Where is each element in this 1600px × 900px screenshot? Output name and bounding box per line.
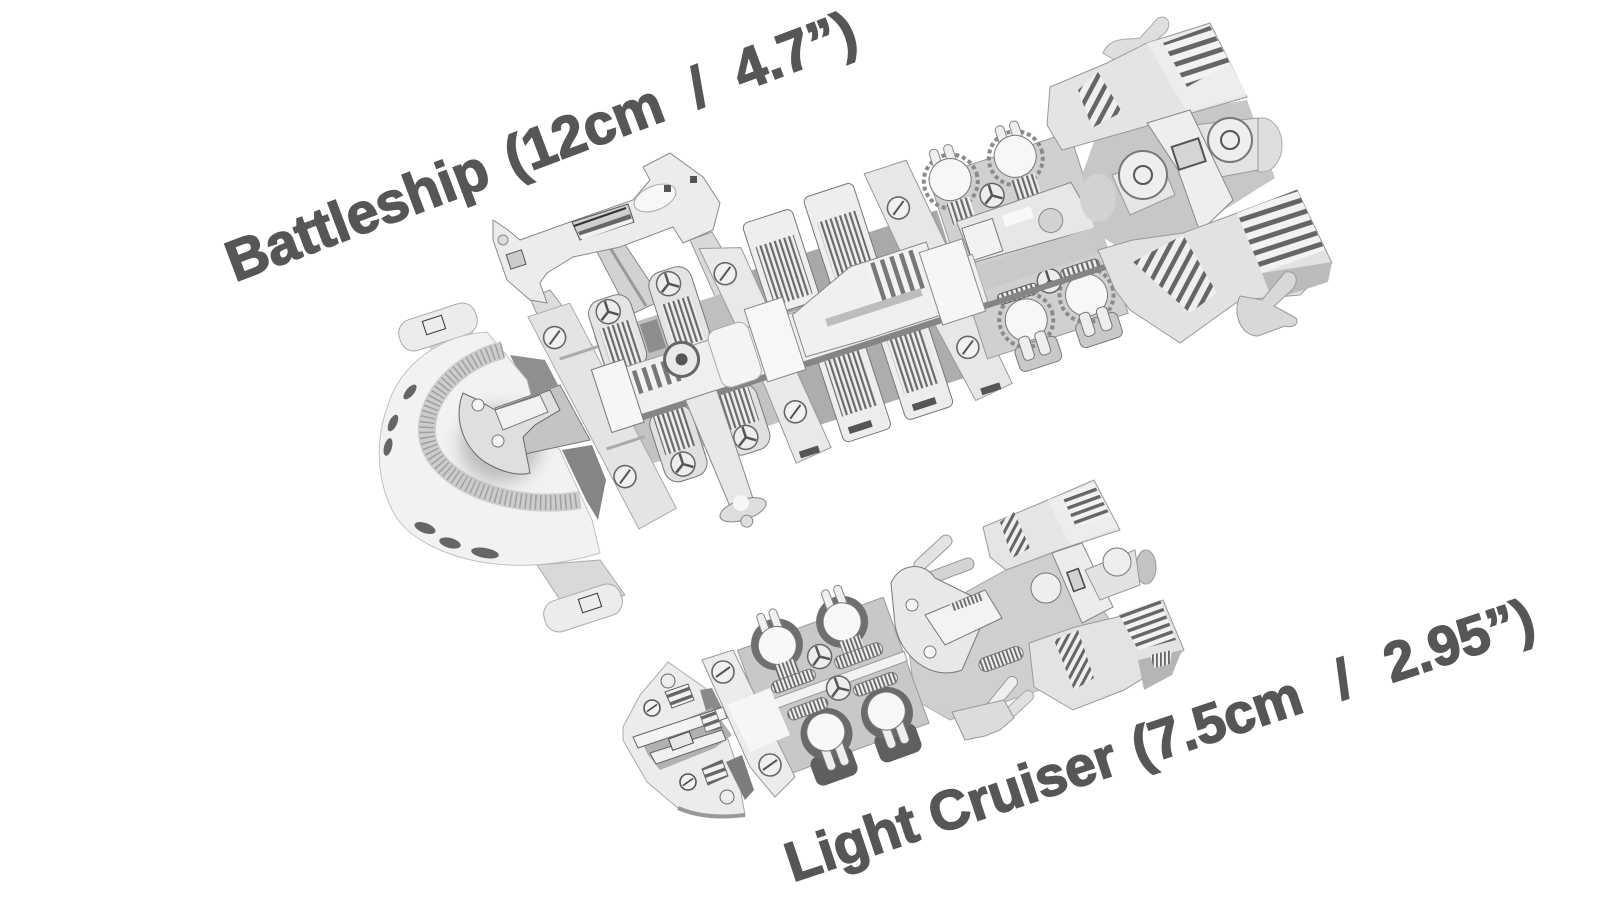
battleship hull section forward and mid (517, 103, 1164, 572)
central spine (586, 186, 1123, 433)
cruiser domes (747, 578, 917, 780)
cruiser hull (728, 572, 938, 798)
prow side tubes (395, 299, 626, 636)
label: Battleship: Battleship (12cm / 4.7”) (217, 0, 865, 294)
wing struts B and C (526, 150, 1015, 525)
cruiser crescent turret (891, 541, 1025, 673)
cruiser rear engine section (906, 480, 1184, 720)
section 3 hull plate (916, 114, 1136, 384)
label: Light Cruiser: Light Cruiser (7.5cm / 2.95”) (777, 587, 1542, 893)
cruiser dark pads (744, 584, 927, 793)
lower ribbed pods, forward (646, 380, 775, 485)
cruiser wing strut (702, 650, 795, 797)
domes (919, 110, 1121, 372)
prow shield disc (379, 332, 600, 565)
wing strut A (528, 291, 679, 541)
ship: light cruiser (623, 480, 1184, 816)
lower mount (683, 386, 771, 534)
battleship upper cannon and pylons (493, 153, 752, 372)
prow connectors (510, 355, 606, 520)
cruiser lower turret (952, 682, 1028, 740)
mid ribbed pods (716, 160, 997, 460)
cruiser spine (757, 635, 913, 728)
cruiser prow (623, 662, 754, 816)
battleship rear engine section (1047, 17, 1332, 343)
upper ribbed pods, forward (582, 263, 713, 377)
prow crescent turret (459, 385, 590, 474)
hangar block (956, 179, 1097, 268)
ship: battleship (379, 17, 1332, 636)
